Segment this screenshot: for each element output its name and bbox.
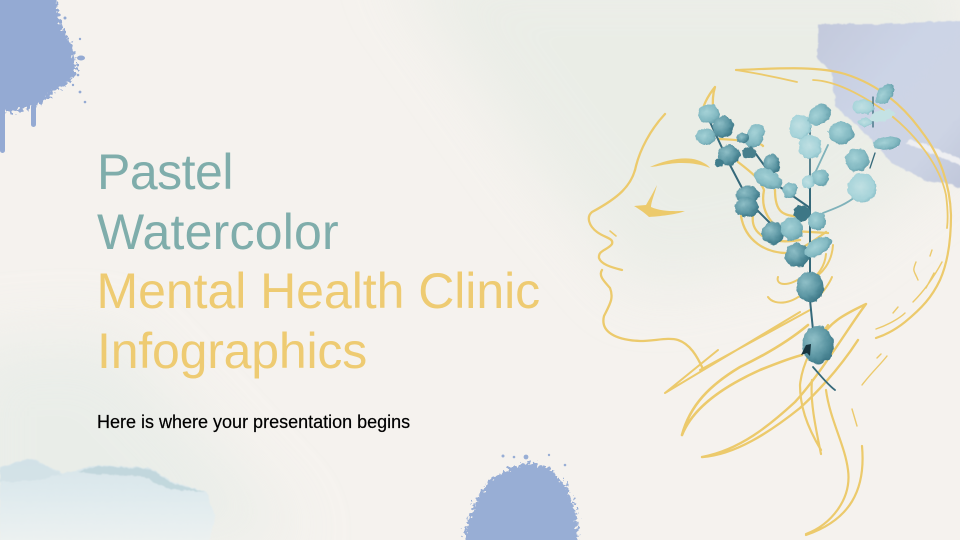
title <box>96 144 540 379</box>
paint splash: top left <box>0 0 86 153</box>
title line: Mental Health Clinic: Mental Health Clinic <box>96 263 540 319</box>
illustration: eucalyptus branch <box>696 81 902 390</box>
upper lip mark <box>610 231 616 236</box>
face profile line <box>589 114 703 369</box>
title line: Watercolor: Watercolor <box>97 204 339 260</box>
illustration: line-art profile head <box>589 68 951 535</box>
dark bud mark <box>801 344 811 356</box>
closed eye <box>634 185 685 217</box>
title line: Pastel: Pastel <box>97 144 233 200</box>
background wash: left sage <box>0 335 300 540</box>
title line: Infographics: Infographics <box>97 323 367 379</box>
eucalyptus leaves <box>696 81 902 364</box>
branch stems <box>710 97 875 390</box>
paint splash: bottom centre <box>462 454 580 540</box>
neck and shoulder strands <box>665 310 810 393</box>
subtitle: Here is where your presentation begins <box>97 412 410 432</box>
hair accent ticks <box>852 250 942 426</box>
watercolor stain: bottom left <box>0 458 215 540</box>
outer hair arcs <box>736 68 951 338</box>
watercolor stain: top right <box>818 21 960 188</box>
inner ear curls <box>702 87 828 253</box>
eyebrow <box>650 158 710 168</box>
background wash: upper sage <box>390 0 960 290</box>
